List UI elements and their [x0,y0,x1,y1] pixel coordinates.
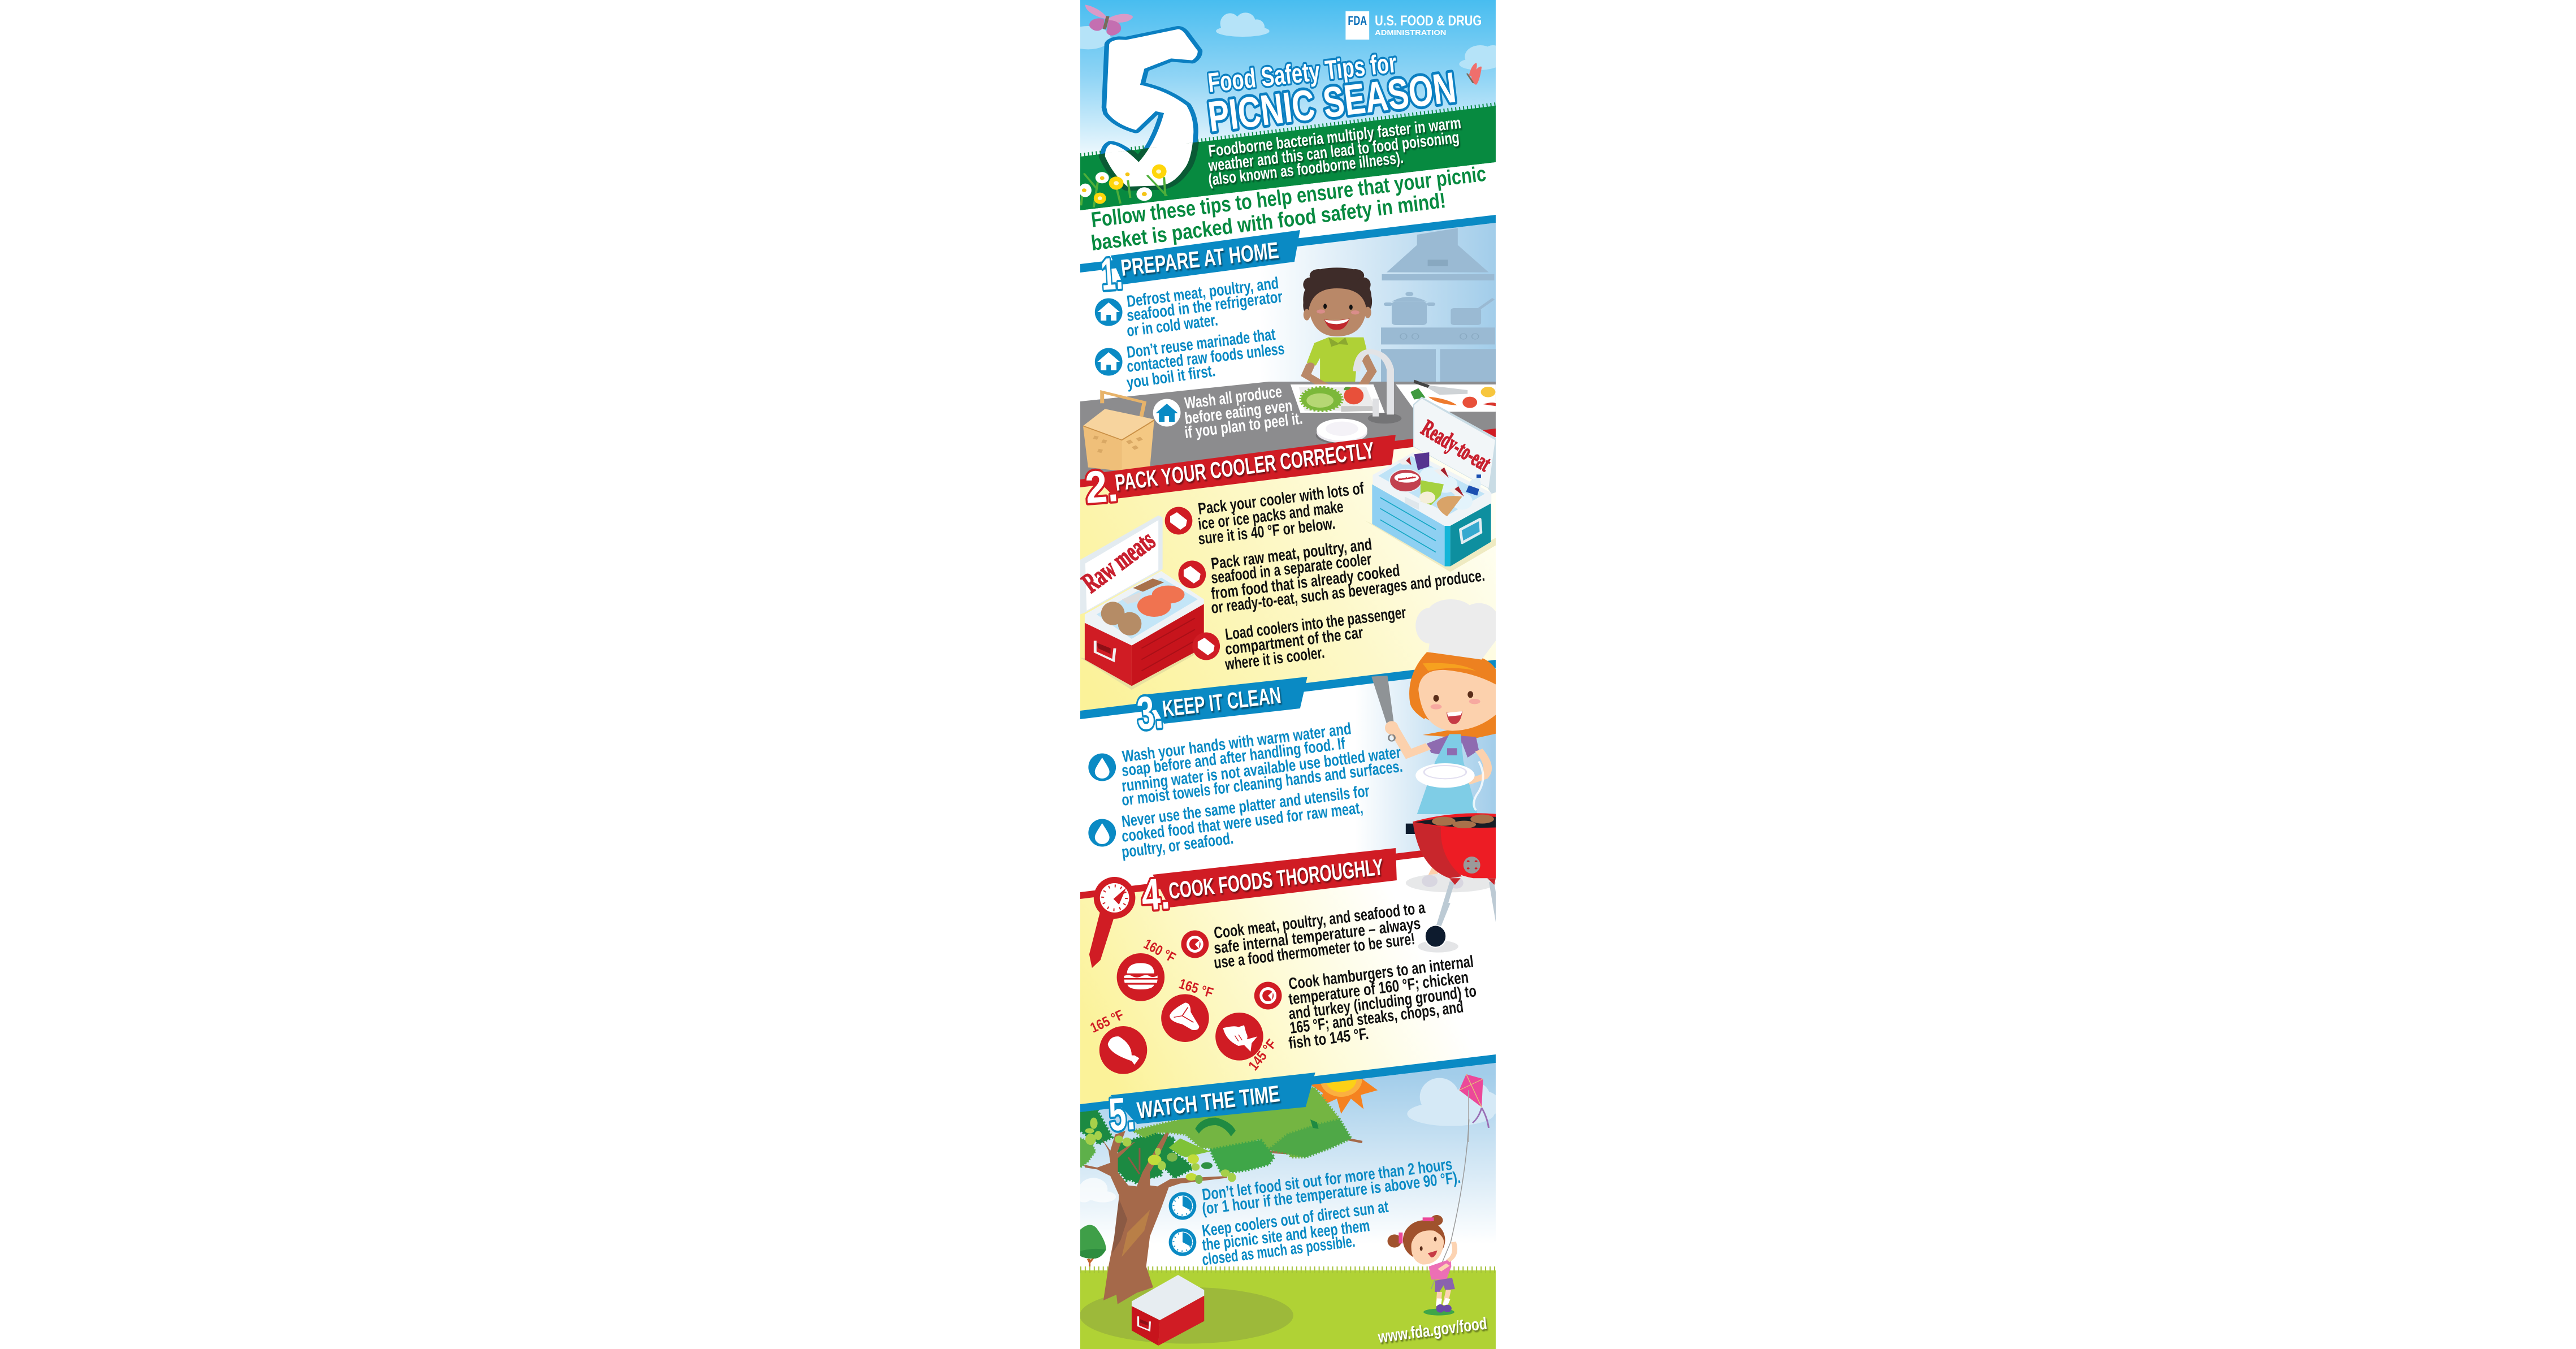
section 3 ribbon band [1080,660,1496,719]
tree mid foliage [1080,1118,1351,1172]
raw meats cooler: Raw meats [1076,525,1161,599]
tip 2c [1192,604,1407,674]
tip 1b: contacted raw foods unless [1126,340,1285,376]
tip 4a [1181,899,1426,972]
intro call to action: basket is packed with food safety in mind! [1090,189,1447,256]
ready-to-eat cooler [1364,397,1497,572]
tree leaves [1085,1118,1236,1184]
tip 2c: compartment of the car [1224,624,1364,659]
tip 1a: seafood in the refrigerator [1125,288,1284,325]
sun [1310,1061,1378,1114]
tip 1c: Wash all produce [1184,383,1283,413]
section 1 heading: PREPARE AT HOME [1119,237,1280,281]
section 5 sky background [1080,1063,1496,1272]
tip 1c: if you plan to peel it. [1184,409,1304,442]
girl's body [1423,1242,1455,1316]
section 3 heading [1135,677,1308,740]
tip 5b: Keep coolers out of direct sun at [1201,1198,1389,1240]
tip 1a: Defrost meat, poultry, and [1125,274,1280,311]
lawn shade [1080,1287,1293,1344]
tip 2a [1165,479,1365,548]
food temperature icons [1088,936,1280,1074]
tip 1b: Don’t reuse marinade that [1125,326,1276,362]
fish temperature: 145 °F [1245,1036,1280,1074]
tip 2c: where it is cooler. [1224,643,1326,674]
tip 2b: Pack raw meat, poultry, and [1210,535,1373,573]
section 1 heading [1099,230,1300,300]
big tree [1080,1087,1362,1304]
chicken temperature: 165 °F [1088,1007,1126,1036]
tip 2b: seafood in a separate cooler [1210,550,1373,587]
intro paragraph: weather and this can lead to food poisoning [1207,128,1460,175]
chef with tongs and plate [1371,599,1499,923]
section 4 background [1080,848,1496,1104]
tip 3b [1088,782,1371,862]
chef hair [1409,652,1499,739]
tip 5a [1169,1156,1462,1220]
picnic basket [1083,392,1154,471]
boy's shirt [1307,338,1368,382]
tip 5b: the picnic site and keep them [1201,1217,1371,1255]
cooler lid [1413,397,1497,494]
cloud and kite [1407,1074,1500,1142]
section 5 heading: 5. [1107,1088,1137,1141]
agency name: U.S. FOOD & DRUG [1375,13,1482,29]
chicken icon [1099,1026,1147,1074]
chef arm and tongs [1371,676,1488,782]
steak icon [1161,994,1209,1042]
ice [1420,468,1473,510]
steam [1474,762,1483,810]
lettuce [1301,387,1341,411]
kite [1459,1074,1489,1128]
burger icon [1117,953,1164,1001]
juice box [1414,452,1429,470]
section 2 heading [1084,435,1396,513]
plates [1316,419,1367,444]
tip 1b: you boil it first. [1125,362,1216,392]
tip 3a: running water is not available use bottled water [1121,743,1402,795]
section 5 ribbon band [1080,1054,1496,1112]
tip 4b: fish to 145 °F. [1288,1025,1370,1053]
boy's head [1304,288,1371,347]
tip 4a: safe internal temperature – always [1213,915,1422,958]
handle [1460,519,1481,543]
sink [1291,384,1385,413]
burger temperature: 160 °F [1141,936,1178,966]
tip 5b [1169,1198,1389,1269]
plate [1415,763,1475,788]
ready-to-eat cooler: Ready-to-eat [1417,415,1495,476]
tip 2a: ice or ice packs and make [1197,498,1344,534]
section 1 heading: 1. [1099,248,1124,300]
big number 5 [1105,29,1198,187]
drink cans [1397,457,1464,496]
intro call to action: Follow these tips to help ensure that your picnic [1090,162,1487,232]
distant cloud [1075,1178,1116,1203]
girl flying kite [1387,1119,1469,1316]
section 2 heading: 2. [1084,460,1120,513]
tip 4a: Cook meat, poultry, and seafood to a [1213,899,1426,942]
tree branches to the right [1264,1139,1362,1153]
agency name second line: ADMINISTRATION [1375,28,1446,37]
tree dark canopy [1080,1110,1193,1183]
FDA letters: FDA [1348,14,1367,28]
clouds [1066,12,1504,70]
title: food safety tips for: Food Safety Tips for [1206,48,1398,98]
strawberries [1389,469,1422,492]
boy's hair [1303,267,1372,314]
tip 4b: Cook hamburgers to an internal [1288,953,1475,993]
tip 3b: poultry, or seafood. [1120,829,1235,862]
steak temperature: 165 °F [1177,976,1215,1001]
grill [1406,813,1499,885]
chef legs and shoes [1422,867,1464,889]
intro paragraph: (also known as foodborne illness). [1207,149,1404,189]
infographic panel [1066,0,1504,1349]
tip 1a: or in cold water. [1125,311,1219,340]
tree light foliage [1133,1087,1351,1157]
tip 1c [1153,383,1304,442]
tip 5a: Don’t let food sit out for more than 2 hours [1201,1156,1453,1204]
tip 3a: Wash your hands with warm water and [1121,720,1352,766]
tip 3a: soap before and after handling food. If [1120,734,1347,780]
tip 2b: from food that is already cooked [1210,561,1401,603]
apple slices bag [1421,480,1444,505]
tip 4a: use a food thermometer to be sure! [1213,930,1416,972]
fish icon [1215,1013,1263,1061]
chef face [1418,663,1499,731]
left side [1372,485,1445,567]
section 1 background [1080,223,1496,407]
chef hat [1415,599,1499,660]
tip 1a [1095,274,1284,340]
header sky background [1080,0,1496,170]
white intro band [1080,162,1496,210]
tip 1c: before eating even [1184,397,1293,428]
section 2 ribbon band [1080,429,1496,487]
kitchen counter [1080,382,1496,486]
butterflies [1085,5,1482,85]
tip 4b: and turkey (including ground) to [1288,982,1477,1023]
apple [1344,387,1363,404]
tip 4b: 165 °F; and steaks, chops, and [1289,998,1465,1037]
section 2 background [1080,437,1496,711]
girl's face [1412,1230,1444,1265]
tip 3b: cooked food that were used for raw meat, [1121,799,1364,846]
website url: www.fda.gov/food [1376,1314,1488,1347]
tree trunk shading [1112,1148,1150,1257]
red cooler on grass [1132,1275,1204,1346]
kitchen backdrop [1381,228,1496,382]
right side [1451,503,1491,567]
section 3 background [1080,668,1496,892]
cooler shadow [1364,520,1497,572]
girl's hair [1387,1215,1445,1260]
shadow under grill [1406,874,1496,892]
tip 2a: Pack your cooler with lots of [1197,479,1365,518]
section 5 heading [1107,1073,1315,1141]
section 4 heading [1140,848,1397,920]
FDA logo box [1345,11,1369,40]
tip 5b: closed as much as possible. [1201,1233,1356,1269]
section 2 heading: PACK YOUR COOLER CORRECTLY [1114,437,1376,496]
tip 4b [1254,953,1477,1053]
header grass band [1080,105,1496,210]
section 3 heading: KEEP IT CLEAN [1161,682,1283,722]
chef body and apron [1417,734,1479,814]
park lawn [1080,1270,1496,1349]
tip 2b: or ready-to-eat, such as beverages and produce. [1210,567,1486,617]
section 4 heading: COOK FOODS THOROUGHLY [1167,854,1385,904]
sandwich [1437,496,1462,516]
rim [1373,452,1491,526]
tip 3b: Never use the same platter and utensils for [1120,782,1371,831]
grill legs [1439,882,1499,923]
boy washing produce [1291,267,1496,444]
water bottle [1466,474,1481,496]
section 3 heading: 3. [1135,686,1164,740]
tip 1b [1095,326,1285,392]
section 4 heading: 4. [1140,869,1171,920]
cloud [1407,1078,1500,1126]
tip 5a: (or 1 hour if the temperature is above 90 °F). [1201,1169,1462,1218]
ready-to-eat cooler: Strawberries [1398,475,1416,481]
girl's bows [1399,1217,1434,1243]
tip 2b [1178,535,1486,617]
tip 2c: Load coolers into the passenger [1224,604,1407,644]
tip 4b: temperature of 160 °F; chicken [1288,968,1470,1009]
title: picnic season: PICNIC SEASON [1206,63,1458,141]
intro paragraph [1207,114,1462,189]
tip 2a: sure it is 40 °F or below. [1197,514,1336,548]
intro paragraph: Foodborne bacteria multiply faster in warm [1207,114,1462,161]
section 1 ribbon band [1080,215,1496,273]
grill lower leg and wheel [1418,903,1458,953]
boy's arms [1306,354,1372,388]
section 5 heading: WATCH THE TIME [1136,1080,1281,1123]
kite string [1431,1119,1469,1289]
raw meats cooler [1076,516,1206,690]
thermometer graphic [1089,877,1135,968]
small background tree [1080,1225,1106,1266]
FDA logo [1345,11,1482,40]
tip 3a [1088,720,1404,810]
tip 3a: or moist towels for cleaning hands and surfaces. [1121,758,1404,810]
flowers [1079,165,1167,207]
cutting board with vegetables [1396,380,1496,412]
faucet [1357,352,1401,423]
section 4 ribbon band [1080,841,1496,899]
tree trunk [1084,1124,1227,1304]
